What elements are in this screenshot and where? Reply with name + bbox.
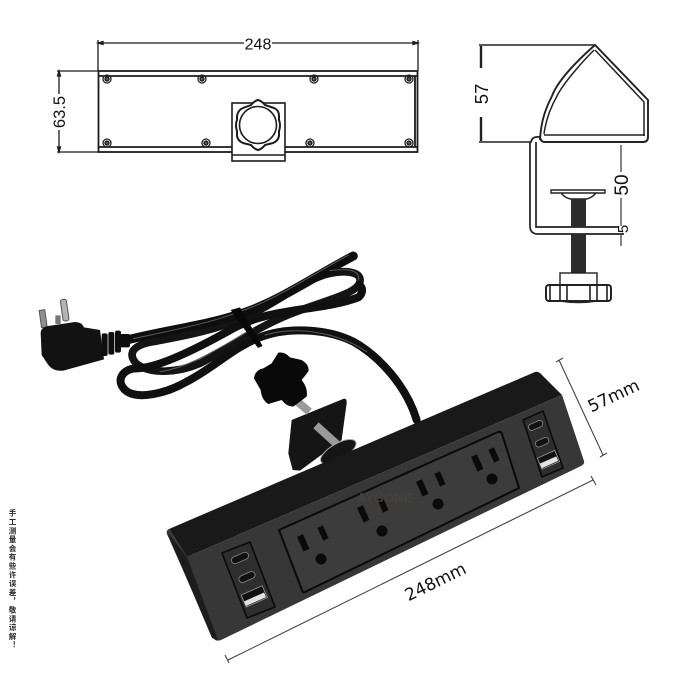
dimension: height 57mm <box>556 358 643 457</box>
housing profile <box>540 45 648 142</box>
strip outline <box>98 71 418 152</box>
outlet 1 <box>297 525 329 564</box>
plug prongs <box>39 299 69 328</box>
outlet panel <box>279 432 519 592</box>
side view drawing <box>471 45 648 302</box>
clamp plate and knob <box>232 100 285 161</box>
vertical note: manual measurement disclaimer: 手工测量会有些许误差，敬请谅解！ <box>8 509 17 650</box>
dimension: height 57mm: 57mm <box>585 376 643 417</box>
dimension: length 248mm: 248mm <box>402 559 470 606</box>
dimension: height 57: 57 <box>471 84 492 104</box>
dimension: width 248 <box>98 36 418 71</box>
strain relief <box>102 331 130 356</box>
outlet 3 <box>416 471 446 510</box>
power strip <box>167 372 584 641</box>
watermark: AYGONE <box>357 490 412 505</box>
mounting screws <box>103 75 413 147</box>
left USB module <box>222 542 275 618</box>
power cord and plug <box>39 255 417 471</box>
clamp bracket <box>288 399 347 471</box>
cable tie <box>231 307 263 348</box>
clamp screw with pad and knob <box>546 190 611 302</box>
outlet 4 <box>471 447 500 484</box>
right USB module <box>523 411 563 477</box>
dimension: clamp opening 50 <box>611 145 633 246</box>
threaded bolt <box>291 396 337 444</box>
dimension: depth 63.5 <box>50 71 98 152</box>
dimension: length 248mm <box>225 476 596 663</box>
top view drawing <box>50 36 418 161</box>
left end face <box>167 532 218 640</box>
outlet 2 <box>357 497 389 536</box>
dimension: width 248: 248 <box>245 36 271 54</box>
knob <box>254 353 309 407</box>
cord loops <box>121 255 417 420</box>
dimension: clamp opening 50: 5 <box>615 225 632 233</box>
front face <box>167 395 584 641</box>
clamp bracket <box>530 137 624 234</box>
dimension: height 57 <box>471 45 595 142</box>
plug body <box>41 322 104 371</box>
dimension: clamp opening 50: 50 <box>612 174 633 196</box>
dimension: depth 63.5: 63.5 <box>51 96 69 128</box>
washer <box>317 435 360 469</box>
top face <box>169 372 562 557</box>
